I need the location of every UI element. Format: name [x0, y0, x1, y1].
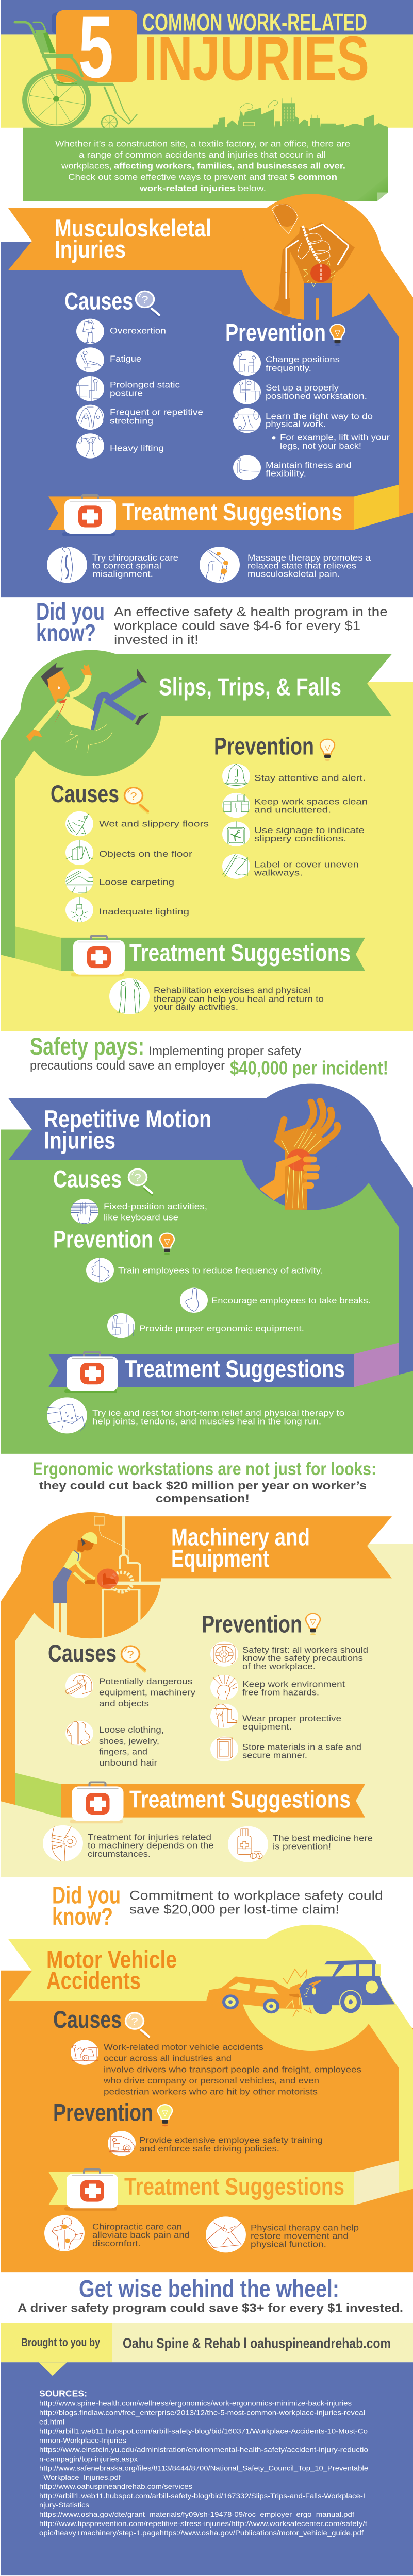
callout: ergonomic workstations [32, 1459, 376, 1505]
ribbon: section banner [8, 1925, 413, 2193]
source links: mmon-Workplace-Injuries [39, 2437, 126, 2445]
source links: http://arbill1.web11.hubspot.com/arbill-safety-blog/bid/160371/Workplace-Accidents-10-Most-Co [39, 2428, 368, 2435]
callout: safety pays: Safety pays: [30, 1032, 144, 1060]
prevention: protective equipment: equipment. [242, 1722, 292, 1732]
treatment: best medicine: The best medicine here [273, 1833, 373, 1843]
cause: repetitive stretching: Frequent or repetitive [110, 407, 203, 417]
prevention: clean work spaces: and uncluttered. [254, 805, 331, 815]
heading: Injuries [55, 235, 126, 263]
heading: Repetitive Motion [44, 1105, 211, 1132]
intro text: workplaces, [61, 161, 112, 171]
treatment: chiropractic: to correct spinal [92, 561, 161, 570]
treatment: chiropractic: Try chiropractic care [92, 553, 178, 563]
intro text: affecting workers, families, and businesses all over. [114, 161, 345, 171]
prevention: workstation: positioned workstation. [266, 391, 367, 401]
callout: did you know 2 [52, 1881, 383, 1930]
source links: njury-Statistics [39, 2502, 89, 2510]
callout: safety pays: Implementing proper safety [148, 1044, 301, 1058]
cause: fatigue [76, 347, 141, 372]
prevention heading: Prevention [53, 2098, 153, 2126]
intro text: Check out some effective ways to prevent and treat [68, 172, 287, 182]
treatment ribbon [15, 926, 365, 976]
cause: heavy lifting [76, 433, 164, 459]
prevention: store materials [210, 1736, 361, 1761]
prevention: signage: Use signage to indicate [254, 825, 365, 835]
treatment ribbon [48, 1343, 399, 1393]
cause: work-related vehicle accidents: involve drivers who transport people and freight, employees [104, 2064, 361, 2074]
cause: overexertion [76, 319, 166, 344]
treatment: depends on circumstances [43, 1825, 214, 1861]
cause: work-related vehicle accidents: pedestrian workers who are hit by other motorists [104, 2087, 318, 2096]
callout: safety pays [30, 1032, 388, 1079]
intro panel [23, 97, 388, 201]
treatment: massage: relaxed state that relieves [247, 561, 356, 570]
prevention: uneven walkways: walkways. [254, 868, 303, 877]
causes heading: Causes [64, 287, 133, 315]
causes heading: ? [131, 2015, 138, 2027]
prevention: change positions: frequently. [266, 363, 311, 373]
illustration: wrist pain [259, 1101, 338, 1210]
cause: loose carpeting [65, 869, 174, 894]
panel: machinery and equipment [1, 1512, 413, 1877]
heading [55, 214, 211, 263]
causes heading: ? [130, 790, 137, 802]
callout: did you know 2: save $20,000 per lost-time claim! [129, 1902, 339, 1917]
treatment: ice and rest: Try ice and rest for short-term relief and physical therapy to [92, 1408, 344, 1418]
cause: fixed position activities [71, 1199, 207, 1224]
source links: _Workplace_Injuries.pdf [39, 2474, 121, 2482]
callout: did you know 2: Did you [52, 1881, 121, 1909]
causes heading: Causes [53, 2006, 122, 2033]
prevention: driver safety training [108, 2131, 323, 2156]
treatment ribbon [48, 485, 399, 536]
prevention: lifting example bullet [272, 433, 390, 451]
source links: https://www.osha.gov/dte/grant_materials/fy09/sh-19478-09/roc_employer_ergo_manual.pdf [39, 2511, 354, 2519]
prevention: protective equipment [210, 1704, 341, 1732]
prevention: signage [222, 822, 365, 846]
cause: wet floors: Wet and slippery floors [99, 819, 209, 828]
cause: loose clothing: unbound hair [99, 1758, 157, 1768]
cause: loose clothing: shoes, jewelry, [99, 1736, 159, 1746]
cause: heavy lifting: Heavy lifting [110, 443, 164, 453]
ribbon: section banner [1, 1512, 392, 1805]
ribbon: section banner [8, 194, 413, 517]
panel: repetitive motion injuries [1, 1084, 413, 1454]
treatment: massage: musculoskeletal pain. [247, 569, 340, 579]
heading: Equipment [171, 1544, 269, 1572]
source links: http://www.spine-health.com/wellness/ergonomics/work-ergonomics-minimize-back-injuries [39, 2400, 352, 2408]
cause: fatigue: Fatigue [110, 354, 141, 364]
treatment: physical therapy: Physical therapy can help [251, 2223, 359, 2232]
prevention: driver safety training: and enforce safe driving policies. [139, 2144, 279, 2154]
prevention: clean work spaces [222, 793, 368, 818]
heading [171, 1523, 310, 1572]
cause: work-related vehicle accidents: occur across all industries and [104, 2054, 232, 2063]
prevention: uneven walkways [222, 854, 359, 879]
treatment: physical therapy [206, 2216, 359, 2252]
callout: did you know 1: Did you [36, 598, 105, 625]
causes heading: Causes [48, 1639, 117, 1667]
callout: ergonomic workstations: compensation! [156, 1492, 250, 1505]
cause: fixed position activities: Fixed-position activities, [104, 1201, 207, 1211]
prevention: safety first: of the workplace. [242, 1662, 316, 1671]
panel: motor vehicle accidents [1, 1925, 413, 2272]
heading: Accidents [46, 1967, 141, 1994]
prevention: safety first [210, 1641, 368, 1671]
source links: opic/heavy+machinery/step-1.pagehttps://www.osha.gov/Publications/motor_vehicle_guide.pdf [39, 2530, 364, 2537]
cause: repetitive stretching [76, 405, 203, 430]
treatment: massage: Massage therapy promotes a [247, 553, 371, 563]
header panel [1, 0, 413, 201]
callout: safety pays: precautions could save an employer [30, 1059, 225, 1072]
source links: http://www.tipsprevention.com/repetitive-stress-injuries/http://www.worksafecenter.com/safety/t [39, 2520, 367, 2528]
causes heading: Causes [53, 1165, 122, 1193]
intro text: a range of common accidents and injuries that occur in all [79, 150, 326, 160]
prevention heading: Prevention [202, 1610, 302, 1638]
ribbon: section banner [1, 650, 392, 958]
treatment: ice and rest [47, 1397, 344, 1433]
prevention: reduce frequency [86, 1258, 323, 1283]
source links: http://arbill1.web11.hubspot.com/arbill-safety-blog/bid/167332/Slips-Trips-and-Falls-Workplace-I [39, 2493, 365, 2500]
badge: number 5 [56, 0, 137, 96]
treatment: chiropractic care: discomfort. [92, 2239, 141, 2248]
prevention: right way to work: physical work. [266, 419, 326, 429]
causes heading: ? [134, 1171, 141, 1184]
illustration: falling worker [26, 663, 150, 753]
cause: inadequate lighting: Inadequate lighting [99, 907, 189, 917]
prevention: protective equipment: Wear proper protective [242, 1714, 341, 1723]
prevention: take breaks [180, 1288, 371, 1313]
prevention: workstation: Set up a properly [266, 383, 339, 393]
prevention heading: Prevention [225, 318, 326, 346]
source links: http://www.oahuspineandrehab.com/services [39, 2483, 192, 2491]
treatment: rehabilitation: your daily activities. [154, 1002, 238, 1012]
prevention: safety first: know the safety precautions [242, 1653, 363, 1663]
prevention heading: Prevention [214, 732, 314, 760]
callout: ergonomic workstations: they could cut back $20 million per year on worker’s [39, 1479, 367, 1493]
prevention: store materials: secure manner. [242, 1751, 307, 1760]
prevention heading: Prevention [53, 1225, 153, 1253]
heading: Slips, Trips, & Falls [159, 673, 341, 701]
callout: did you know 1: An effective safety & health program in the [114, 604, 388, 619]
source links: http://blogs.findlaw.com/free_enterprise/2013/12/the-5-most-common-workplace-injuries-reveal [39, 2409, 365, 2417]
treatment: chiropractic care [44, 2215, 190, 2251]
prevention: fitness: flexibility. [266, 469, 306, 479]
treatment: chiropractic care: alleviate back pain and [92, 2230, 190, 2240]
footer: brought to you by [1, 2323, 413, 2362]
intro text: below. [238, 183, 266, 193]
intro text [55, 139, 350, 193]
prevention: free from hazards: free from hazards. [242, 1687, 319, 1697]
callout: did you know 2: Commitment to workplace safety could [129, 1888, 383, 1903]
prevention: ergonomic equipment [107, 1313, 304, 1338]
intro text: Whether it’s a construction site, a textile factory, or an office, there are [55, 139, 350, 148]
prevention: ergonomic equipment: Provide proper ergonomic equipment. [139, 1324, 304, 1333]
cause: repetitive stretching: stretching [110, 416, 153, 426]
cause: dangerous equipment: equipment, machinery [99, 1687, 195, 1697]
prevention: change positions [233, 351, 340, 376]
treatment: massage [200, 547, 371, 583]
panel: slips trips and falls [1, 650, 413, 1031]
prevention: alert: Stay attentive and alert. [254, 773, 366, 783]
panel: musculoskeletal injuries [1, 194, 413, 597]
intro text: 5 common [290, 172, 337, 182]
illustration: back pain skeleton [270, 200, 355, 320]
callout: did you know 2: know? [52, 1902, 113, 1930]
callout: get wise behind the wheel: A driver safety program could save $3+ for every $1 invested. [18, 2301, 403, 2315]
prevention: workstation [233, 379, 367, 404]
cause: wet floors [65, 811, 209, 836]
source links: http://www.safenebraska.org/files/8113/8444/8700/National_Safety_Council_Top_10_Preventable [39, 2465, 368, 2472]
icon: wheelchair [15, 22, 137, 133]
treatment ribbon [15, 1773, 365, 1823]
prevention: uneven walkways: Label or cover uneven [254, 859, 359, 869]
cause: inadequate lighting [65, 897, 189, 922]
treatment: rehabilitation: therapy can help you heal and return to [154, 994, 324, 1004]
cause: fixed position activities: like keyboard use [104, 1212, 178, 1222]
treatment: physical therapy: restore movement and [251, 2231, 349, 2241]
source links: n-campagin/top-injuries.aspx [39, 2455, 138, 2463]
cause: overexertion: Overexertion [110, 326, 166, 335]
prevention: fitness [233, 455, 352, 480]
prevention: lifting example bullet: legs, not your back! [280, 441, 361, 451]
prevention: fitness: Maintain fitness and [266, 460, 352, 470]
treatment: rehabilitation [109, 978, 324, 1014]
cause: loose clothing: fingers, and [99, 1747, 147, 1756]
prevention: alert [222, 764, 366, 789]
callout: did you know 1: know? [36, 619, 96, 647]
source links: ed.html [39, 2418, 64, 2426]
callout: get wise behind the wheel [18, 2275, 403, 2315]
treatment: physical therapy: physical function. [251, 2240, 326, 2249]
heading: Machinery and [171, 1523, 310, 1551]
badge: number 5: 5 [78, 0, 113, 96]
illustration: machine operator [53, 1516, 161, 1638]
heading: Musculoskeletal [55, 214, 211, 242]
causes heading: ? [127, 1648, 134, 1660]
cause: work-related vehicle accidents: who drive company or personal vehicles, and even [103, 2076, 319, 2086]
cause: work-related vehicle accidents [71, 2040, 361, 2096]
callout: did you know 1 [36, 598, 388, 647]
source links [39, 2400, 368, 2537]
cause: loose carpeting: Loose carpeting [99, 877, 174, 887]
treatment: depends on circumstances: circumstances. [88, 1849, 151, 1859]
prevention: safety first: Safety first: all workers should [242, 1645, 368, 1655]
prevention: free from hazards: Keep work environment [242, 1679, 345, 1689]
treatment: depends on circumstances: Treatment for injuries related [88, 1832, 211, 1842]
cause: work-related vehicle accidents: Work-related motor vehicle accidents [104, 2042, 263, 2052]
cause: prolonged static posture: Prolonged static [110, 380, 180, 389]
intro text: work-related injuries [139, 183, 235, 193]
prevention: free from hazards [210, 1675, 345, 1700]
heading [44, 1105, 211, 1154]
illustration: city skyline [213, 97, 388, 128]
treatment ribbon [48, 2161, 399, 2211]
cause: prolonged static posture: posture [110, 388, 143, 398]
prevention: driver safety training: Provide extensive employee safety training [139, 2136, 323, 2145]
causes heading: ? [141, 293, 148, 306]
illustration: car crash [206, 1960, 395, 2017]
treatment: chiropractic care: Chiropractic care can [92, 2222, 182, 2231]
cause: prolonged static posture [76, 376, 180, 401]
prevention: store materials: Store materials in a safe and [242, 1742, 361, 1752]
callout: did you know 1: invested in it! [114, 632, 199, 647]
treatment: ice and rest: help joints, tendons, and muscles heal in the long run. [92, 1416, 321, 1426]
treatment: rehabilitation: Rehabilitation exercises and physical [154, 986, 310, 995]
prevention: reduce frequency: Train employees to reduce frequency of activity. [118, 1266, 323, 1275]
footer: brought to you by: Brought to you by [21, 2336, 101, 2349]
prevention: change positions: Change positions [266, 354, 340, 364]
cause: loose clothing: Loose clothing, [99, 1725, 164, 1735]
ribbon: section banner [8, 1084, 413, 1375]
cause: dangerous equipment: Potentially dangerous [99, 1676, 192, 1686]
heading [46, 1945, 177, 1994]
panel: sources [1, 2362, 413, 2575]
cause: objects on floor [65, 840, 192, 865]
causes heading: Causes [51, 779, 119, 807]
heading: Injuries [44, 1126, 115, 1154]
prevention: clean work spaces: Keep work spaces clean [254, 796, 368, 806]
prevention: right way to work [233, 408, 373, 433]
cause: objects on floor: Objects on the floor [99, 849, 192, 859]
prevention: lifting example bullet: For example, lift with your [280, 433, 390, 443]
cause: dangerous equipment [65, 1673, 195, 1708]
prevention: right way to work: Learn the right way to do [266, 411, 373, 421]
treatment: chiropractic [47, 547, 178, 583]
panel: sources: SOURCES: [39, 2389, 87, 2399]
heading: Motor Vehicle [46, 1945, 177, 1973]
treatment: best medicine: is prevention! [273, 1841, 331, 1851]
treatment: best medicine [228, 1826, 373, 1862]
treatment: depends on circumstances: to machinery depends on the [88, 1841, 214, 1850]
treatment: chiropractic: misalignment. [92, 569, 153, 579]
cause: loose clothing [65, 1721, 164, 1768]
prevention: take breaks: Encourage employees to take breaks. [211, 1296, 371, 1306]
cause: dangerous equipment: and objects [99, 1699, 149, 1708]
source links: https://www.einstein.yu.edu/administration/environmental-health-safety/accident-injury-reductio [39, 2446, 368, 2454]
prevention: signage: slippery conditions. [254, 834, 346, 843]
callout: did you know 1: workplace could save $4-6 for every $1 [113, 618, 360, 633]
